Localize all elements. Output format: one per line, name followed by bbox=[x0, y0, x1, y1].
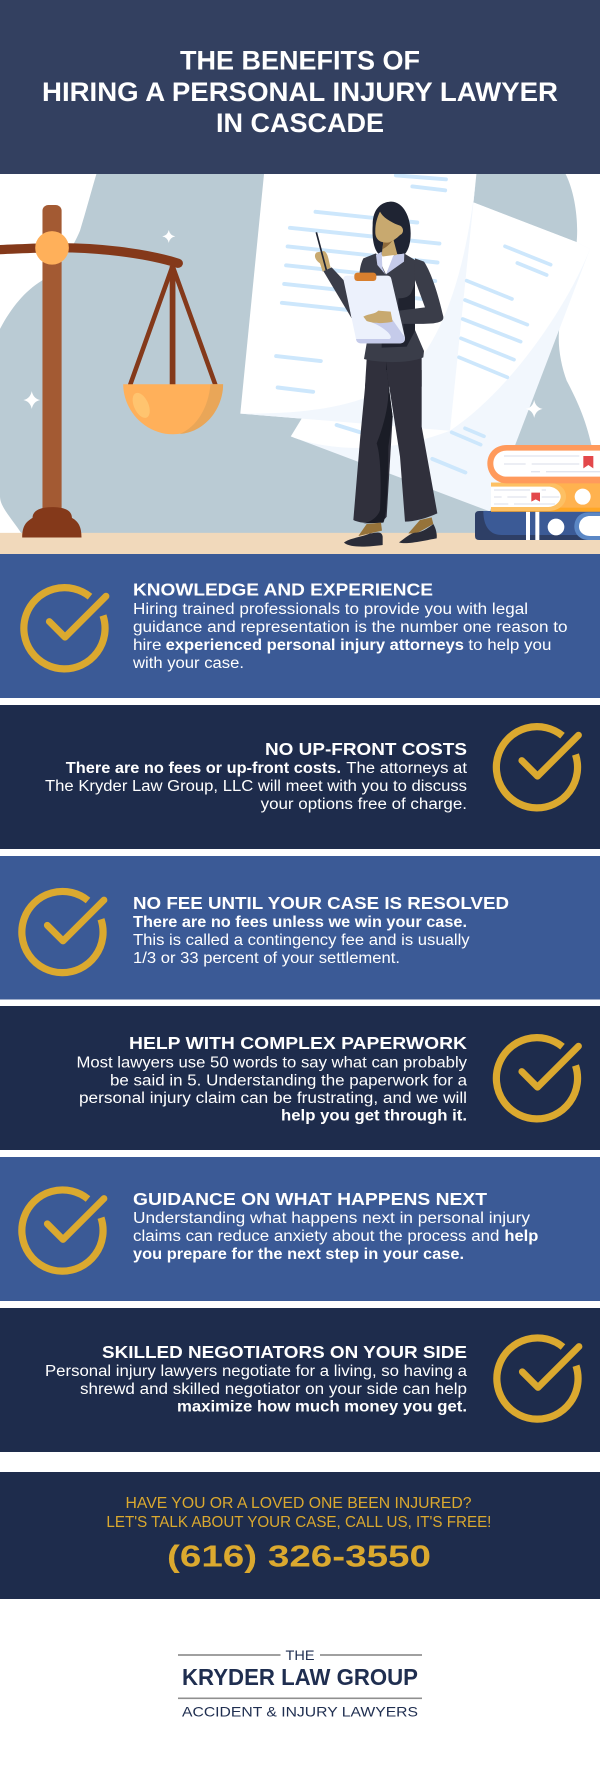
body text: Understanding what happens next in personal injury bbox=[133, 1210, 530, 1227]
heading: HELP WITH COMPLEX PAPERWORK bbox=[129, 1033, 467, 1053]
body text: to help you bbox=[468, 637, 551, 654]
body text: hire bbox=[133, 637, 162, 654]
title: IN CASCADE bbox=[216, 108, 384, 138]
body text: your options free of charge. bbox=[261, 796, 467, 813]
body text bbox=[76, 1054, 467, 1125]
call to action text bbox=[106, 1495, 491, 1531]
title: THE BENEFITS OF bbox=[180, 46, 420, 76]
figure: woman with clipboard bbox=[315, 202, 443, 547]
body text: There are no fees or up-front costs. bbox=[66, 760, 341, 777]
body text bbox=[132, 601, 568, 672]
panel: call to action bbox=[0, 1472, 600, 1599]
body text: 1/3 or 33 percent of your settlement. bbox=[133, 950, 400, 967]
panel: hero illustration bbox=[0, 174, 600, 555]
logo: Kryder Law Group: THE bbox=[286, 1648, 314, 1663]
body text: personal injury claim can be frustrating, and we will bbox=[79, 1090, 467, 1107]
call to action text: HAVE YOU OR A LOVED ONE BEEN INJURED? bbox=[126, 1495, 472, 1512]
panel: no fee until resolved bbox=[0, 856, 600, 1000]
panel: title header bbox=[0, 0, 600, 174]
heading: NO FEE UNTIL YOUR CASE IS RESOLVED bbox=[133, 893, 509, 913]
icon: check mark bbox=[496, 1038, 578, 1119]
document: right page bbox=[291, 202, 590, 511]
icon: check mark bbox=[22, 891, 104, 973]
icon: scales of justice bbox=[0, 205, 223, 537]
icon: check mark bbox=[496, 727, 578, 808]
panel: no up-front costs bbox=[0, 705, 600, 849]
body text: claims can reduce anxiety about the process and bbox=[133, 1228, 499, 1245]
body text: The Kryder Law Group, LLC will meet with you to discuss bbox=[45, 778, 467, 795]
body text: with your case. bbox=[132, 655, 244, 672]
icon: check mark bbox=[497, 1338, 579, 1419]
title bbox=[42, 46, 558, 138]
body text: The attorneys at bbox=[346, 760, 468, 777]
body text: experienced personal injury attorneys bbox=[166, 637, 464, 654]
body text: shrewd and skilled negotiator on your side can help bbox=[80, 1381, 467, 1398]
body text bbox=[133, 1210, 538, 1263]
body text: help bbox=[504, 1228, 538, 1245]
body text: Hiring trained professionals to provide you with legal bbox=[133, 601, 528, 618]
body text: you prepare for the next step in your case. bbox=[133, 1246, 464, 1263]
title: HIRING A PERSONAL INJURY LAWYER bbox=[42, 77, 558, 107]
document lines: right page bbox=[452, 246, 551, 445]
icon: check mark bbox=[22, 1190, 104, 1271]
body text: There are no fees unless we win your case. bbox=[133, 914, 467, 931]
panel: skilled negotiators bbox=[0, 1308, 600, 1452]
background blob bbox=[0, 174, 592, 536]
body text bbox=[45, 760, 468, 813]
heading: SKILLED NEGOTIATORS ON YOUR SIDE bbox=[102, 1342, 467, 1362]
icon: check mark bbox=[24, 588, 106, 669]
phone number: (616) 326-3550 bbox=[167, 1538, 431, 1574]
body text: be said in 5. Understanding the paperwork for a bbox=[110, 1072, 467, 1089]
panel: guidance on what happens next bbox=[0, 1157, 600, 1301]
document: front page bbox=[240, 174, 476, 431]
body text: maximize how much money you get. bbox=[177, 1399, 467, 1416]
heading: KNOWLEDGE AND EXPERIENCE bbox=[133, 580, 433, 600]
heading: NO UP-FRONT COSTS bbox=[265, 739, 467, 759]
icon: stack of books bbox=[475, 445, 600, 540]
logo: Kryder Law Group bbox=[178, 1648, 422, 1720]
body text: This is called a contingency fee and is usually bbox=[133, 932, 470, 949]
logo: Kryder Law Group: KRYDER LAW GROUP bbox=[182, 1664, 418, 1690]
icon: sparkles bbox=[23, 230, 543, 418]
body text: Most lawyers use 50 words to say what can probably bbox=[76, 1054, 467, 1071]
call to action text: LET'S TALK ABOUT YOUR CASE, CALL US, IT'S FREE! bbox=[106, 1514, 491, 1531]
logo: Kryder Law Group: ACCIDENT & INJURY LAWYERS bbox=[182, 1704, 418, 1720]
body text bbox=[133, 914, 470, 967]
heading: GUIDANCE ON WHAT HAPPENS NEXT bbox=[133, 1189, 487, 1209]
body text: Personal injury lawyers negotiate for a living, so having a bbox=[45, 1363, 467, 1380]
body text: help you get through it. bbox=[281, 1108, 467, 1125]
panel: knowledge and experience bbox=[0, 554, 600, 698]
floor bbox=[0, 533, 600, 555]
panel: complex paperwork bbox=[0, 1006, 600, 1150]
body text bbox=[45, 1363, 467, 1416]
body text: guidance and representation is the number one reason to bbox=[133, 619, 568, 636]
